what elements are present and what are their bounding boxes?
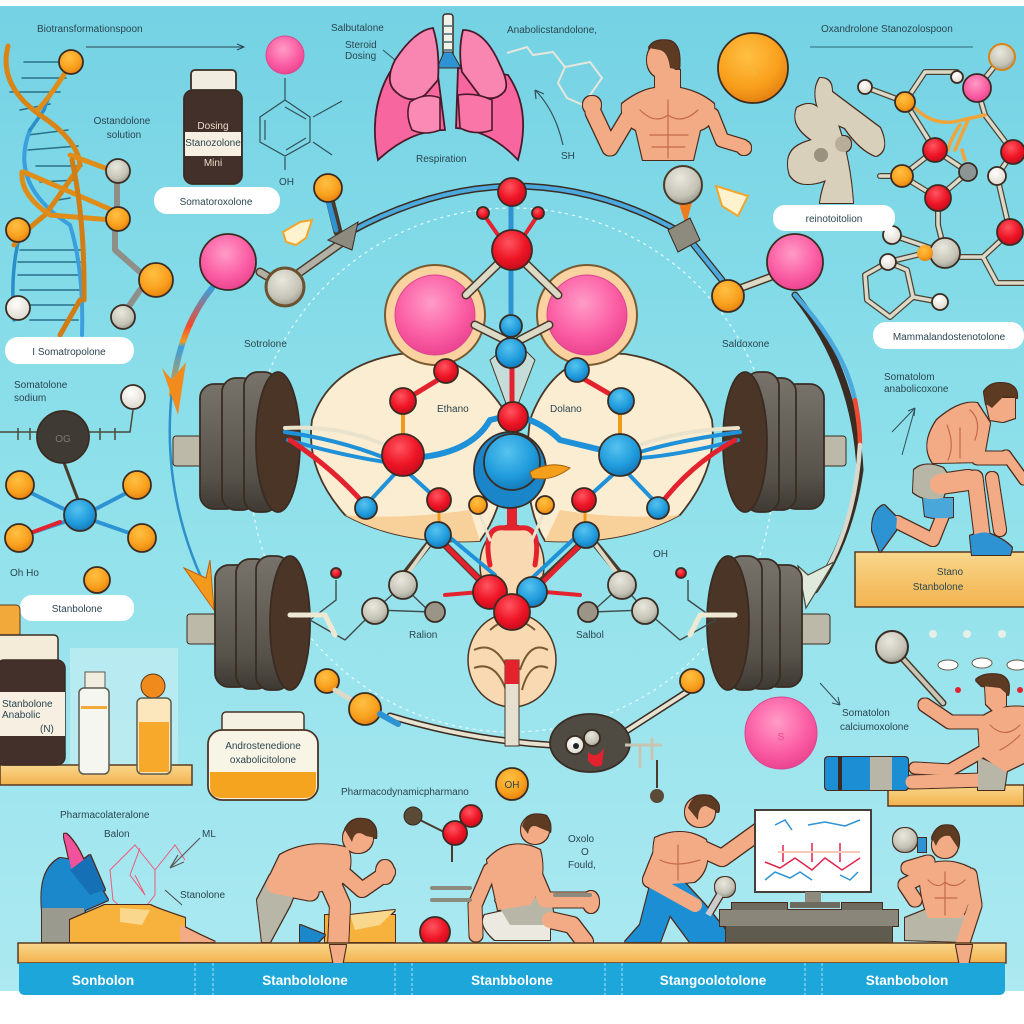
bottom centre device [315,669,704,803]
icon: brown bottle: Mini [204,158,222,169]
man at monitor muscle detail [660,845,700,880]
left molecule: sodium [14,393,46,404]
figure: dumbbell curl man [893,825,975,945]
arrow heads [162,186,834,610]
figure: kneeling man on block [855,372,1024,607]
connector right top [664,166,823,312]
dumbbell bottom right [707,556,830,690]
icon: pink pill [745,697,817,769]
bottom left caption with ring [60,810,225,920]
figure: kneeling man on block: anabolicoxone [884,384,949,395]
label: top centre: SH [561,151,575,162]
label: bottom centre heading: Pharmacodynamicpharmano [341,787,469,798]
left molecule: Oh Ho [10,568,39,579]
figure: kneeling man on block: Stanbolone [913,582,964,593]
connector left top [200,174,358,306]
bottom left caption with ring: Stanolone [180,890,225,901]
central molecule atoms [355,178,669,548]
figure: seated man [475,814,599,942]
icon: lungs [375,14,523,160]
label: dna caption: Ostandolone [94,116,151,127]
bottom label band: Sonbolon [72,973,134,988]
label: lungs: Respiration [416,154,467,165]
jar: oxabolicitolone [230,755,297,766]
central labels: OH [653,549,668,560]
shelf with jar and bottles: Anabolic [2,710,40,721]
label: pill Stanbolone: Stanbolone [52,604,103,615]
seated man caption: Fould, [568,860,596,871]
icon: brown bottle: Dosing [197,121,229,132]
bottom label band: Stanbololone [262,973,348,988]
label: pill Stanbolone [20,595,134,621]
label: pill Somatolone: Somatoroxolone [180,197,253,208]
central labels: Dolano [550,404,582,415]
bottom left caption with ring: ML [202,829,216,840]
figure: crouching man [257,819,394,948]
icon: orange pill [718,33,788,103]
DNA side molecule [6,50,173,329]
icon: small orange coin [496,768,528,800]
central labels: Ralion [409,630,437,641]
dashed inner circle [250,208,774,732]
cream lobes [311,340,713,605]
dumbbell top left [173,372,300,512]
floor plank [18,943,1006,963]
label: right pill 1: reinotoitolion [806,214,862,225]
seated man caption: Oxolo [568,834,595,845]
left molecule [0,380,156,593]
wooden table left [70,905,395,942]
icon: small orange coin: OH [504,780,520,791]
figure: kneeling man on block: Stano [937,567,964,578]
shelf with jar and bottles [0,605,192,785]
figure: man at monitor [625,795,772,942]
label: pill left [5,337,134,364]
central labels: Sotrolone [244,339,287,350]
dumbbell top right [723,372,846,512]
knot at centre bottom [468,613,556,746]
label: dna caption [94,116,151,141]
seated man caption: O [581,847,589,858]
big circular arrows [170,186,860,745]
label: right pill 1 [773,205,895,231]
dumbbell man muscle detail [928,872,965,915]
label: top captions: Dosing [345,51,376,62]
central labels [244,339,770,641]
monitor with chart [755,810,871,908]
icon: pink ball with ring formula [260,36,342,188]
jar [208,712,318,800]
label: dna caption: solution [107,130,141,141]
label: top right heading: Oxandrolone Stanozolospoon [821,24,953,35]
central labels: Ethano [437,404,469,415]
figure: reclining man with roller: calciumoxolone [840,722,909,733]
figure: kneeling man on block: Somatolom [884,372,935,383]
left molecule: OG [55,434,71,445]
label: top captions: Salbutalone [331,23,384,34]
label: pill Somatolone [154,187,280,214]
icon: orange pill: S [750,67,757,78]
bottom left caption with ring: Balon [104,829,130,840]
pink hormone balls [385,265,637,365]
bottom left caption with ring: Pharmacolateralone [60,810,150,821]
bottom label band: Stanbbolone [471,973,553,988]
figure: top flexing man [583,40,751,160]
icon: pink pill: S [778,732,785,743]
label: top captions: Steroid [345,40,377,51]
icon: brown bottle [184,70,242,184]
figure: reclining man with roller: Somatolon [842,708,890,719]
desk [720,903,898,942]
central labels: Salbol [576,630,604,641]
shelf with jar and bottles: Stanbolone [2,699,53,710]
central molecule bonds [285,200,740,595]
figure: reclining man with roller [820,630,1024,806]
bottom label band: Stanbobolon [866,973,948,988]
lower grey molecules [290,568,735,640]
bottom label band [19,963,1005,995]
label: right pill 2 [873,322,1024,349]
bottom hands overlapping the floor [330,945,972,966]
jar: Androstenedione [225,741,301,752]
heading top left with arrow: Biotransformationspoon [37,24,143,35]
icon: curled receptor shape [788,78,884,203]
label: top centre [507,25,602,162]
icon: molecule top right [858,44,1024,317]
figure: scientist [41,834,108,942]
heading top left with arrow [37,24,244,50]
molecule with red balls [404,805,482,947]
icon: pink ball with ring formula: OH [279,177,294,188]
icon: DNA helix [6,46,112,335]
left molecule: Somatolone [14,380,68,391]
dumbbell bottom left [187,556,310,690]
bottom label band: Stangoolotolone [660,973,767,988]
shelf with jar and bottles: (N) [40,724,54,735]
label: right pill 2: Mammalandostenotolone [893,332,1006,343]
icon: brown bottle: Stanozolone [185,138,241,149]
top man muscle detail [640,100,698,158]
label: pill left: I Somatropolone [32,347,106,358]
central labels: Saldoxone [722,339,770,350]
label: top centre: Anabolicstandolone, [507,25,597,36]
label: top captions [331,23,395,62]
seated man caption [432,834,596,900]
